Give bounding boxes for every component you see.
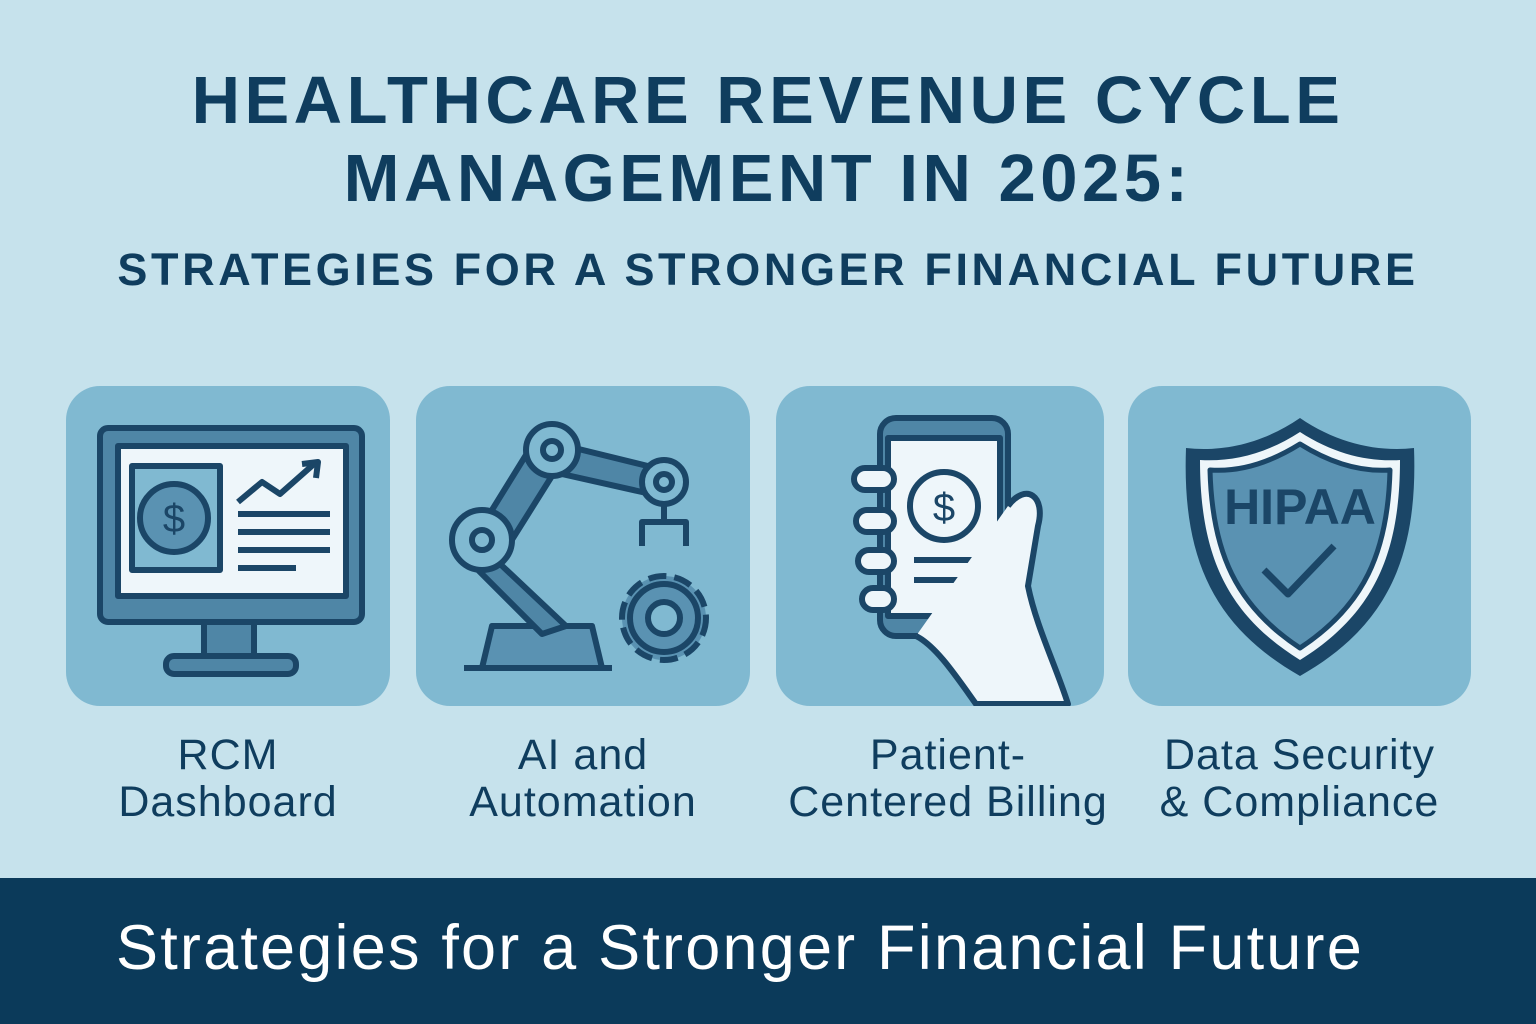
icon: phone in hand: $ bbox=[933, 486, 955, 530]
panel: AI automation bbox=[416, 386, 750, 706]
panel: HIPAA bbox=[1128, 386, 1471, 706]
icon: shield: HIPAA bbox=[1224, 479, 1376, 535]
title bbox=[192, 63, 1344, 216]
label: AI: Automation bbox=[469, 778, 697, 826]
label: billing: Centered Billing bbox=[788, 778, 1108, 826]
icon: robot arm and gear bbox=[452, 424, 706, 668]
panel: patient billing bbox=[776, 386, 1104, 706]
label: billing bbox=[788, 731, 1108, 826]
label: billing: Patient- bbox=[870, 731, 1026, 779]
icon: monitor: $ bbox=[163, 497, 185, 541]
subtitle: STRATEGIES FOR A STRONGER FINANCIAL FUTURE bbox=[117, 244, 1419, 295]
footer band bbox=[0, 878, 1536, 1024]
label: RCM bbox=[118, 731, 338, 826]
panel: RCM dashboard bbox=[66, 386, 390, 706]
label: RCM: Dashboard bbox=[118, 778, 338, 826]
title: MANAGEMENT IN 2025: bbox=[344, 141, 1192, 216]
icon: monitor bbox=[100, 428, 362, 674]
label: security: & Compliance bbox=[1160, 778, 1439, 826]
footer band: Strategies for a Stronger Financial Future bbox=[116, 913, 1364, 983]
label: security: Data Security bbox=[1164, 731, 1435, 779]
icon: shield bbox=[1186, 418, 1414, 676]
label: RCM: RCM bbox=[178, 731, 278, 779]
label: security bbox=[1160, 731, 1439, 826]
label: AI: AI and bbox=[518, 731, 648, 779]
label: AI bbox=[469, 731, 697, 826]
title: HEALTHCARE REVENUE CYCLE bbox=[192, 63, 1344, 138]
icon: phone in hand bbox=[854, 418, 1068, 704]
